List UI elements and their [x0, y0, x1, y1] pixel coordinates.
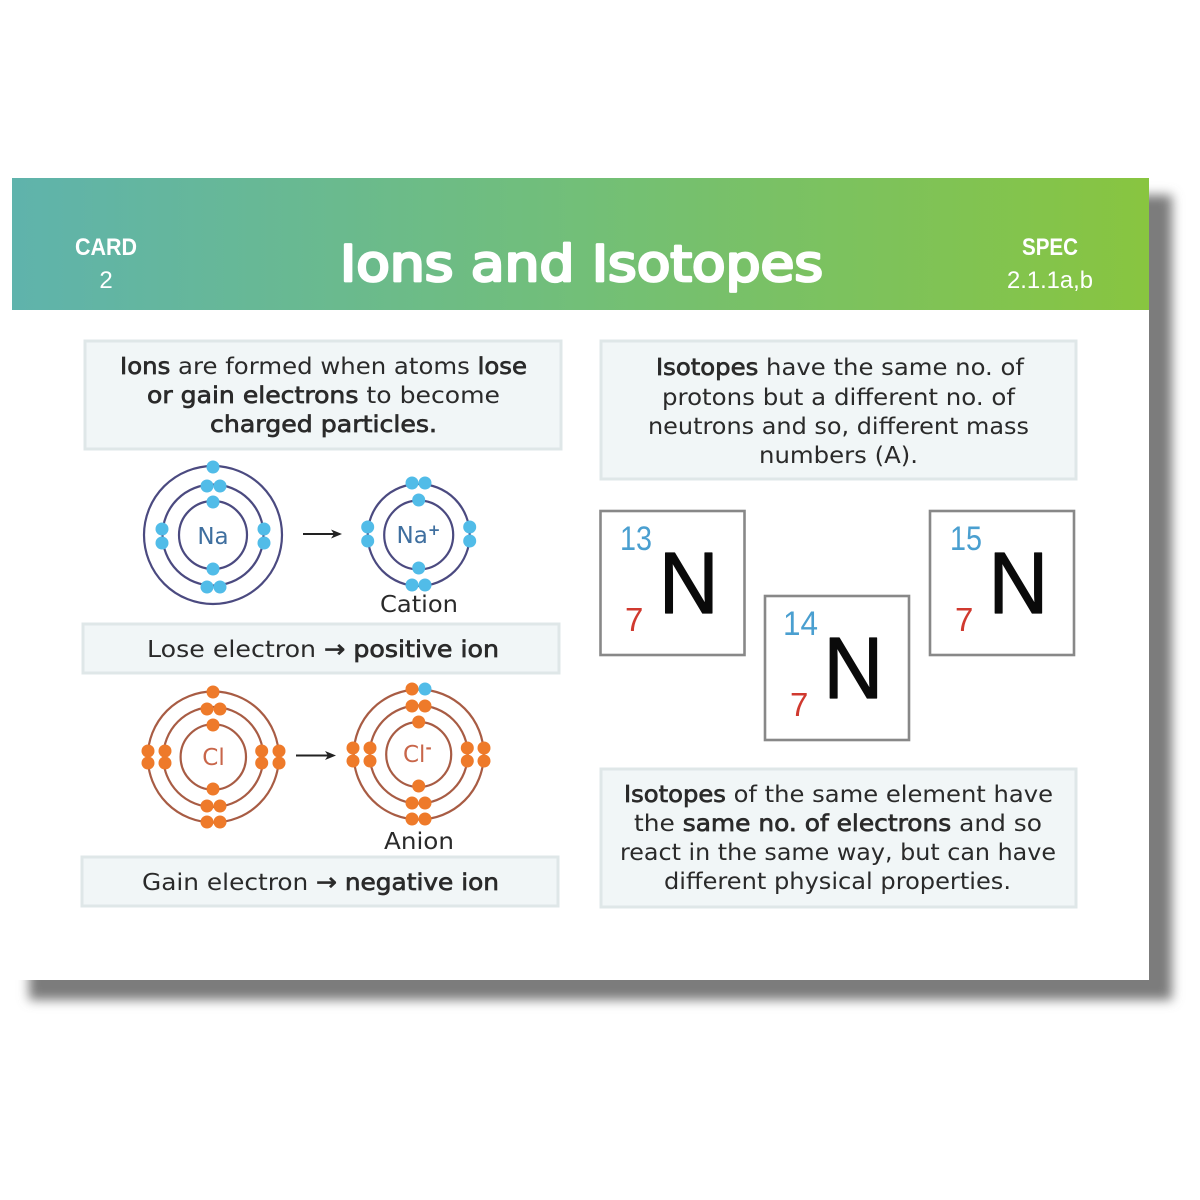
spec reference: 2.1.1a,b — [1007, 267, 1093, 294]
title: Ions and Isotopes — [340, 235, 823, 293]
diagram: chlorine atom — [142, 686, 286, 828]
panel: ions definition: Ions are formed when atoms lose — [120, 352, 527, 380]
panel: isotopes definition: neutrons and so, different mass — [648, 412, 1029, 440]
card: nitrogen-15: N — [988, 535, 1048, 632]
diagram: sodium atom: Na — [197, 524, 229, 550]
panel: isotope properties: react in the same way, but can have — [620, 838, 1056, 866]
panel: isotopes definition: Isotopes have the same no. of — [656, 353, 1025, 381]
arrow: chlorine to anion — [296, 751, 336, 760]
panel: lose electron: Lose electron → positive ion — [147, 635, 499, 663]
diagram: chloride anion: - — [425, 739, 432, 757]
card: nitrogen-13: N — [659, 535, 719, 632]
panel: isotopes definition: protons but a different no. of — [662, 383, 1016, 411]
diagram: sodium cation: + — [428, 521, 440, 539]
panel: gain electron — [82, 857, 558, 906]
diagram: chlorine atom: Cl — [202, 745, 225, 771]
card: nitrogen-15 — [930, 511, 1074, 655]
header band — [12, 178, 1149, 310]
card: nitrogen-13: 7 — [625, 601, 643, 638]
card number: CARD — [75, 234, 137, 261]
diagram: sodium cation — [361, 476, 476, 592]
card number — [75, 234, 137, 294]
panel: ions definition — [85, 341, 561, 449]
diagram: sodium cation: Na — [396, 523, 428, 549]
card: nitrogen-13 — [600, 511, 744, 655]
spec reference — [1007, 234, 1093, 294]
panel: isotopes definition: numbers (A). — [759, 441, 918, 469]
diagram: chloride anion: Cl — [403, 742, 425, 768]
card: nitrogen-15: 7 — [955, 601, 973, 638]
panel: ions definition: charged particles. — [210, 410, 437, 438]
card: nitrogen-14 — [765, 596, 909, 740]
label: cation: Cation — [380, 590, 458, 618]
panel: lose electron — [83, 624, 559, 673]
card: nitrogen-14: 14 — [783, 605, 818, 643]
panel: gain electron: Gain electron → negative ion — [142, 868, 499, 896]
diagram: sodium atom — [144, 460, 282, 604]
spec reference: SPEC — [1022, 234, 1078, 261]
panel: isotopes definition — [601, 341, 1076, 479]
diagram: chloride anion — [346, 682, 490, 826]
arrow: sodium to cation — [303, 530, 342, 538]
card shadow — [29, 195, 1172, 1000]
panel: isotope properties: the same no. of electrons and so — [634, 809, 1042, 837]
card number: 2 — [99, 267, 113, 294]
panel: isotope properties: different physical properties. — [664, 867, 1011, 895]
card: nitrogen-14: N — [823, 620, 883, 717]
card: nitrogen-15: 15 — [950, 520, 982, 558]
card: nitrogen-13: 13 — [620, 520, 652, 558]
label: anion: Anion — [384, 827, 454, 855]
panel: ions definition: or gain electrons to become — [147, 381, 500, 409]
card: nitrogen-14: 7 — [790, 686, 808, 723]
card background — [12, 178, 1149, 980]
panel: isotope properties: Isotopes of the same element have — [624, 780, 1053, 808]
panel: isotope properties — [601, 769, 1076, 907]
